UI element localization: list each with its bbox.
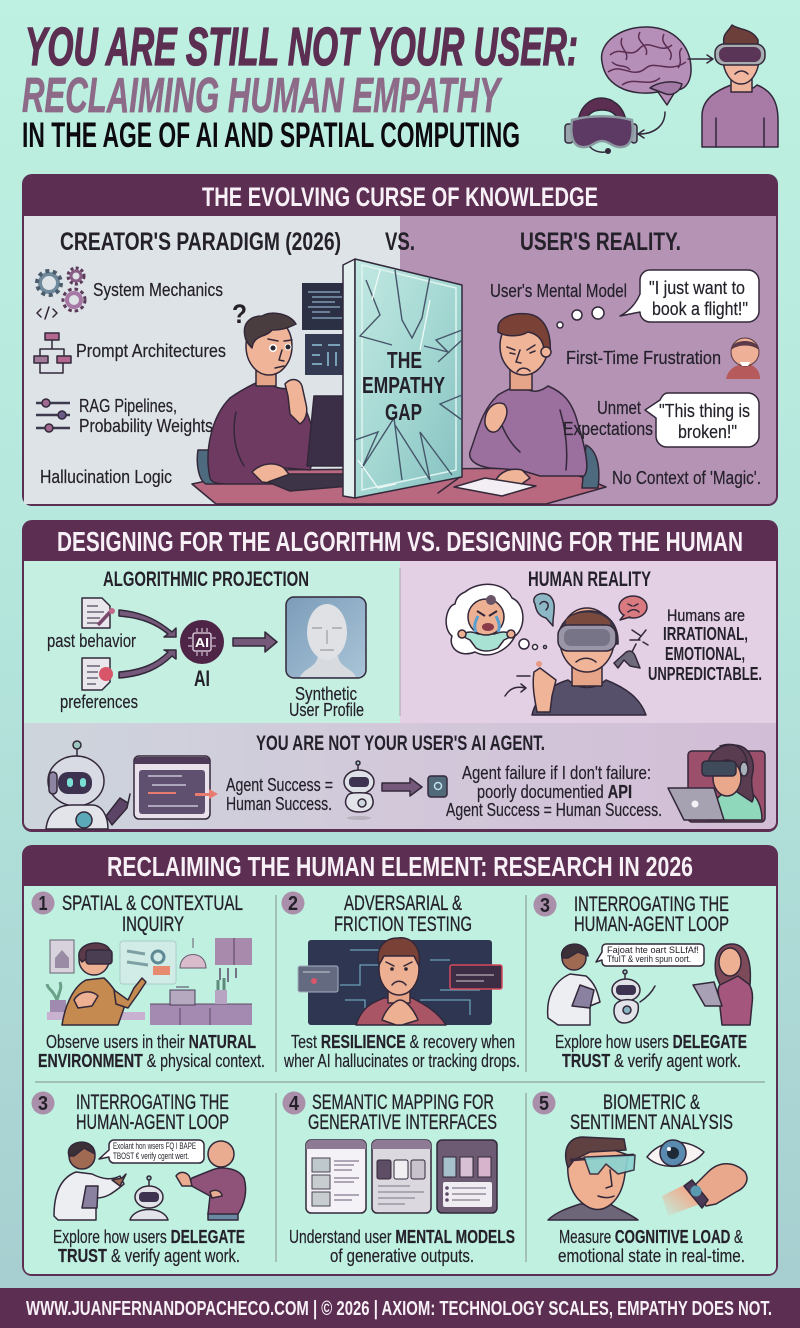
heading: you are not your user's AI agent: YOU ARE NOT YOUR USER'S AI AGENT. [256,732,545,755]
card description: TRUST & verify agent work. [58,1246,240,1266]
speech bubble: this thing is broken: broken!" [678,422,737,442]
panel: reclaiming the human element [22,845,778,1276]
speech bubble: book a flight: "I just want to [649,278,745,298]
illustration: eye [647,1140,704,1166]
card description [289,1227,515,1266]
icon: brain to VR user [565,25,778,154]
icon: document past behavior [82,598,115,628]
card description: Test RESILIENCE & recovery when [291,1032,515,1052]
card title: SEMANTIC MAPPING FOR [312,1091,494,1114]
illustration: kitchen VR inquiry [47,938,252,1025]
card title: GENERATIVE INTERFACES [308,1111,497,1134]
card: interrogating the human-agent loop (top) [534,893,752,1071]
icon: brain [602,27,691,105]
speech bubble: this thing is broken: "This thing is [659,401,750,421]
card title [334,892,472,936]
text: agent failure: Agent Success = Human Success. [446,800,662,820]
text: question mark: ? [232,299,247,329]
illustration: people discussing agent [54,1140,246,1220]
number badge 4 [282,1092,306,1115]
illustration: user and agent with tablet [548,944,752,1025]
icon: frustrated user [726,338,760,379]
text: the empathy gap: EMPATHY [362,372,445,398]
text: preferences: preferences [60,692,138,712]
illustration: interface card three [437,1140,497,1213]
card title [574,893,729,936]
illustration: person with VR and laptop [668,744,765,822]
title [22,17,578,155]
illustration: the empathy gap glass [343,259,462,498]
text: humans are irrational: Humans are [667,606,745,625]
card title [308,1091,497,1134]
text: first-time frustration: First-Time Frustration [566,348,721,368]
arrow: robot to API [382,778,422,796]
illustration: user and agent with tablet: TfuIT & verih spun oort. [607,954,691,964]
icon: user with goggles [702,25,778,147]
text: no context of magic: No Context of 'Magic'. [612,468,761,488]
text: agent success equals human success: Human Success. [226,794,332,814]
text: unmet expectations: Expectations [563,419,653,439]
illustration: robot [46,741,130,829]
card: semantic mapping [282,1091,515,1266]
card description: Measure COGNITIVE LOAD & [559,1227,743,1247]
icon: VR headset [565,98,637,154]
thought bubbles [557,307,604,328]
number badge 3 [534,894,556,917]
text: the empathy gap: THE [387,347,422,373]
arrow: behavior to AI [119,610,176,637]
card description [558,1227,745,1266]
text: system mechanics: System Mechanics [93,280,223,300]
icon: API square [428,776,447,797]
icon: stress marks and gesture lines [505,630,648,696]
text: rag pipelines: RAG Pipelines, [79,396,177,416]
card title [62,892,243,936]
icon: small robot [344,761,374,820]
text: agent success equals human success: Agent Success = [226,775,333,795]
title: RECLAIMING HUMAN EMPATHY [22,69,503,123]
card title: HUMAN-AGENT LOOP [574,913,729,936]
heading: algorithmic projection: ALGORITHMIC PROJECTION [103,568,309,591]
text: humans are irrational: EMOTIONAL, [665,644,745,664]
card description: ENVIRONMENT & physical context. [38,1051,265,1071]
text: agent failure: poorly documentied API [477,782,632,802]
card description [53,1227,245,1266]
text: prompt architectures: Prompt Architectures [76,341,226,361]
number badge 3 repeat [32,1092,54,1115]
text: the empathy gap [362,347,445,425]
thought bubble: crying baby [446,584,546,655]
text: unmet expectations: Unmet [597,398,641,418]
illustration: creator at desk [197,313,316,484]
text: synthetic user profile [289,684,364,720]
card description: wher AI hallucinates or tracking drops. [283,1051,520,1071]
illustration: code screens [302,283,348,375]
card title: INQUIRY [122,913,184,936]
card title: SPATIAL & CONTEXTUAL [62,892,243,915]
card: biometric and sentiment analysis [532,1091,747,1266]
heading: THE EVOLVING CURSE OF KNOWLEDGE [202,182,598,212]
card: spatial and contextual inquiry [32,892,265,1071]
card title: BIOMETRIC & [603,1091,700,1114]
number badge 3 repeat: 3 [38,1093,48,1115]
card title: FRICTION TESTING [334,913,472,936]
number badge 5 [532,1092,556,1115]
text: rag pipelines [79,396,213,436]
card title: SENTIMENT ANALYSIS [570,1111,733,1134]
illustration: code window [134,756,218,819]
text: agent failure: Agent failure if I don't failure: [462,763,651,783]
illustration: face with AR glasses [548,1137,638,1220]
card title: INTERROGATING THE [76,1091,229,1114]
icon: AI chip [180,620,224,664]
text: past behavior: past behavior [47,631,136,651]
text: AI: AI [194,666,210,691]
number badge 1: 1 [38,893,48,915]
icon: document preferences [82,658,113,690]
illustration: desk [192,468,606,504]
text: synthetic user profile: User Profile [289,700,364,720]
number badge 2: 2 [288,893,298,915]
illustration: user at desk [438,314,599,496]
column heading: versus: VS. [385,228,415,256]
number badge 5: 5 [539,1093,549,1115]
text: user's mental model: User's Mental Model [490,281,627,301]
image: synthetic user profile [286,597,366,678]
text: synthetic user profile: Synthetic [295,684,357,704]
footer band [0,1288,800,1328]
illustration: stressed user with broken interface [298,938,502,1025]
card description [283,1032,520,1071]
speech bubble: book a flight [620,270,759,322]
card description: emotional state in real-time. [558,1246,745,1266]
card description: Observe users in their NATURAL [46,1032,256,1052]
card title: ADVERSARIAL & [344,892,462,915]
text: the empathy gap: GAP [385,399,422,425]
card description: of generative outputs. [330,1246,474,1266]
text: unmet expectations [563,398,653,439]
card: interrogating the human-agent loop (bottom) [32,1091,246,1266]
panel: the evolving curse of knowledge [22,174,778,506]
icon: AI chip: AI [195,635,209,650]
number badge 3: 3 [540,895,550,917]
illustration: user and agent with tablet: Fajoat hte oart SLLfAf! [607,945,699,955]
text: hallucination logic: Hallucination Logic [40,467,172,487]
illustration: frustrated VR user [532,608,646,715]
illustration: interface card two [372,1140,431,1213]
card title [570,1091,733,1134]
card title [76,1091,229,1134]
icon: prompt flowchart [34,333,71,373]
illustration: monitor and keyboard [268,396,350,491]
number badge 1 [32,892,54,915]
card description: Explore how users DELEGATE [53,1227,245,1247]
column heading: creator's paradigm: CREATOR'S PARADIGM (2026) [60,228,341,256]
heading: human reality: HUMAN REALITY [528,568,651,591]
illustration: wrist with wearable [662,1164,747,1216]
icon: angry speech bubble [619,596,647,620]
text: agent failure [446,763,662,820]
card title: INTERROGATING THE [574,893,729,916]
icon: swirl of confusion [534,594,554,626]
text: rag pipelines: Probability Weights [79,416,213,436]
divider [399,568,401,716]
card: adversarial and friction testing [282,892,520,1071]
arrow: brain to goggles [688,55,713,63]
icon: gears and code [37,268,85,319]
card description: TRUST & verify agent work. [562,1051,741,1071]
speech bubble: this thing is broken [645,393,759,447]
number badge 4: 4 [289,1093,300,1115]
card description [555,1032,747,1071]
illustration: interface card one [306,1140,366,1213]
number badge 2 [282,892,304,915]
card description: Understand user MENTAL MODELS [289,1227,515,1247]
card description [38,1032,265,1071]
arrow: AI to profile [233,632,277,652]
arrow: preferences to AI [119,650,176,678]
icon: sliders [36,399,70,432]
text: humans are irrational: IRRATIONAL, [663,624,748,644]
panel: designing for the algorithm vs the human [22,520,778,832]
arrow: curved to headset [638,112,665,138]
title: IN THE AGE OF AI AND SPATIAL COMPUTING [22,116,520,155]
text: agent success equals human success [226,775,333,814]
speech bubble: book a flight: book a flight!" [652,299,748,319]
card title: HUMAN-AGENT LOOP [76,1111,229,1134]
card description: Explore how users DELEGATE [555,1032,747,1052]
illustration: people discussing agent: Exolant hon wsers FQ I BAPE [113,1141,196,1151]
column heading: user's reality: USER'S REALITY. [520,228,681,256]
text: humans are irrational [648,606,762,684]
illustration: people discussing agent: TBOST € verify cgent wert. [113,1151,189,1161]
